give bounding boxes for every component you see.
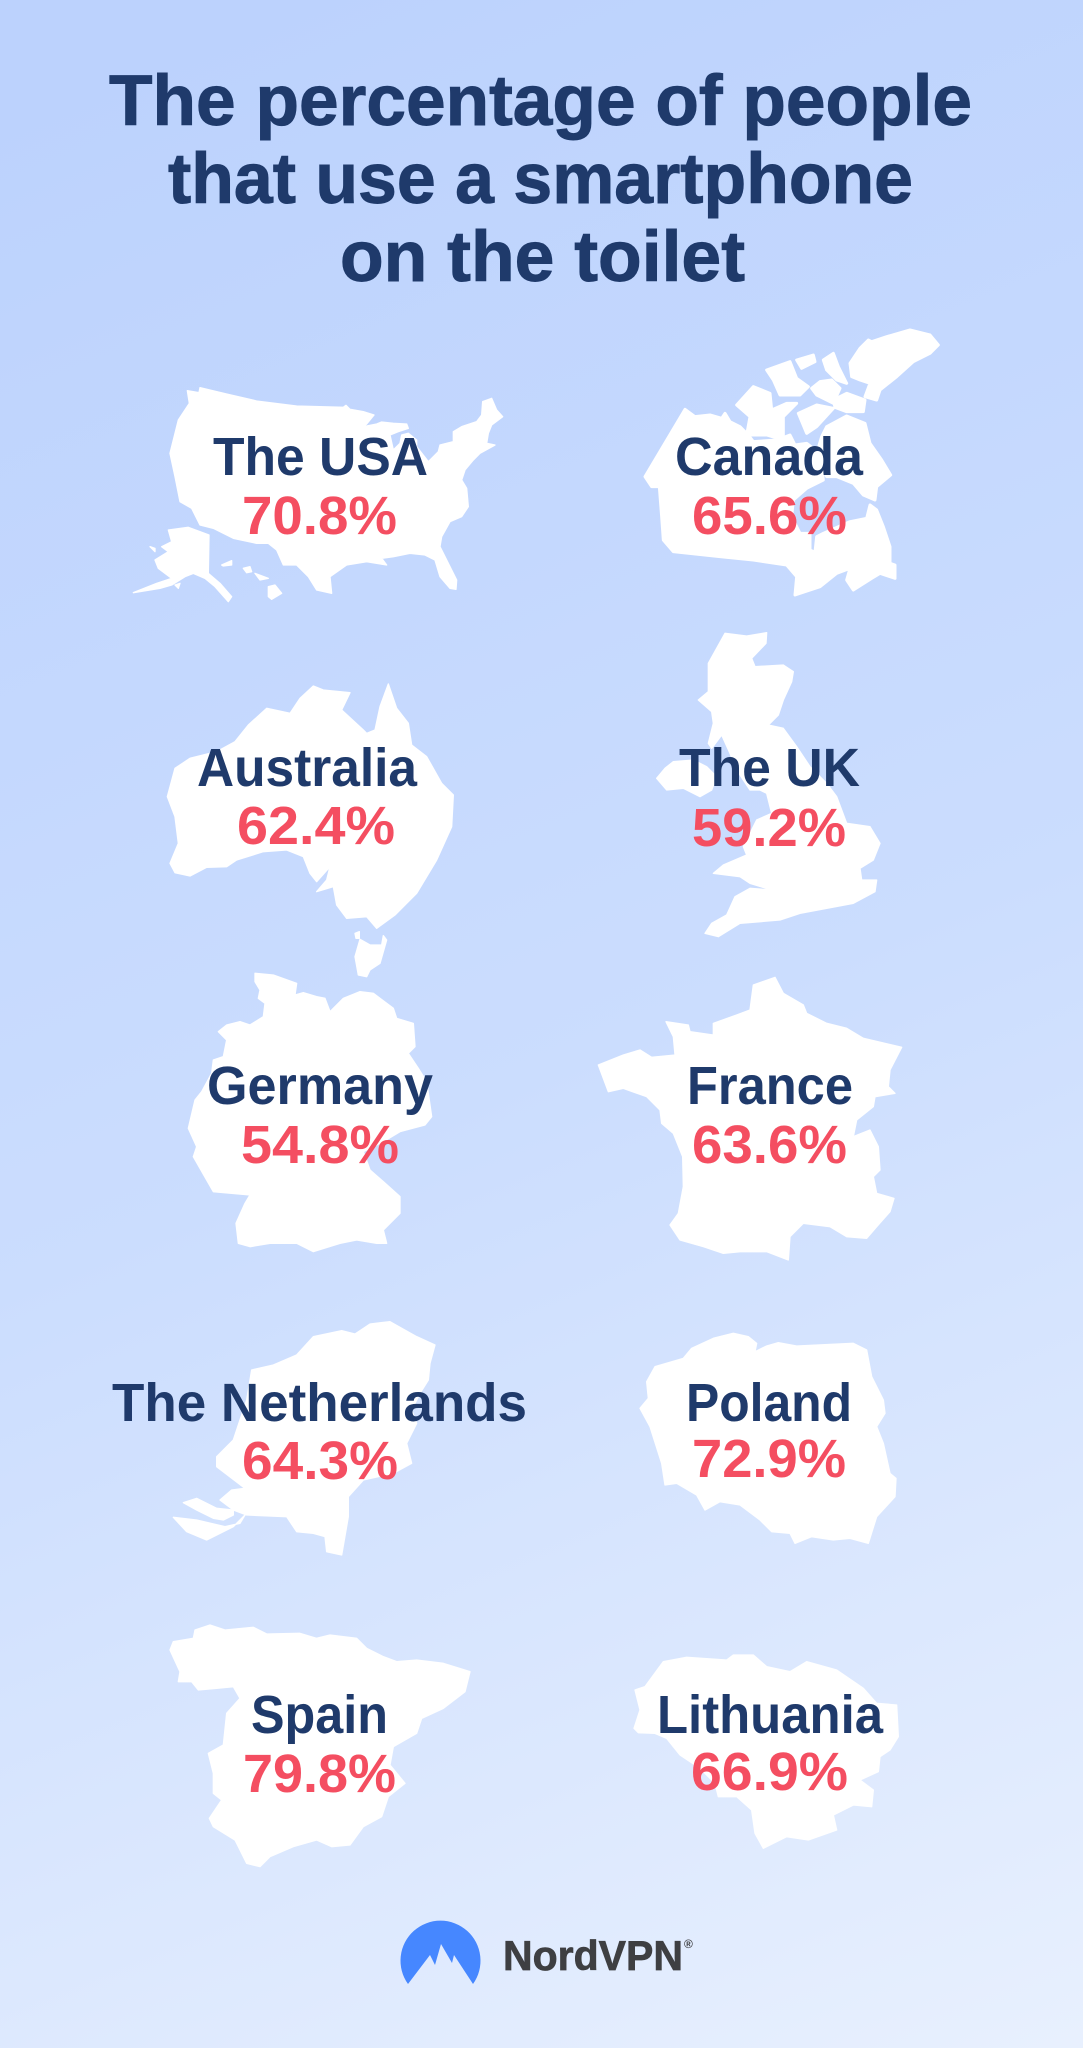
value: 62.4%: 62.4%	[237, 796, 395, 856]
label: Germany: Germany	[207, 1056, 433, 1116]
label: The UK: The UK	[679, 738, 860, 798]
map: Spain	[170, 1625, 470, 1867]
label: France: France	[687, 1056, 853, 1116]
value: 59.2%: 59.2%	[692, 798, 846, 858]
label: The Netherlands: The Netherlands	[112, 1373, 527, 1433]
panel: France	[598, 977, 902, 1260]
map: USA	[133, 388, 503, 602]
value: 66.9%: 66.9%	[691, 1742, 848, 1802]
title: that use a smartphone	[168, 140, 913, 219]
value: 64.3%: 64.3%	[242, 1431, 398, 1491]
panel: Canada	[645, 330, 938, 595]
label: The USA: The USA	[213, 427, 428, 487]
label: Australia: Australia	[197, 738, 418, 798]
panel: Australia	[167, 684, 453, 977]
map: Germany	[188, 973, 432, 1252]
title	[109, 62, 972, 297]
label: Spain: Spain	[251, 1685, 388, 1745]
logo: NordVPN	[400, 1921, 693, 1984]
value: 65.6%: 65.6%	[692, 486, 847, 546]
map: France	[598, 977, 902, 1260]
map: Poland	[640, 1333, 896, 1543]
panel: The UK	[657, 633, 880, 937]
registered mark: ®	[684, 1937, 693, 1951]
title: The percentage of people	[109, 62, 972, 141]
icon: NordVPN mountain dome	[400, 1921, 480, 1984]
label: Poland: Poland	[686, 1373, 852, 1433]
map: Netherlands	[173, 1322, 435, 1555]
panel: Lithuania	[634, 1655, 898, 1848]
panel: The USA	[133, 388, 503, 602]
map: Australia	[167, 684, 453, 977]
value: 70.8%: 70.8%	[242, 486, 397, 546]
map: UK	[657, 633, 880, 937]
value: 54.8%: 54.8%	[241, 1115, 399, 1175]
panel: Spain	[170, 1625, 470, 1867]
title: on the toilet	[340, 218, 745, 297]
value: 63.6%: 63.6%	[692, 1115, 847, 1175]
map: Lithuania	[634, 1655, 898, 1848]
wordmark: NordVPN	[503, 1932, 683, 1979]
panel: Germany	[188, 973, 433, 1252]
panel: Poland	[640, 1333, 896, 1543]
value: 72.9%: 72.9%	[692, 1429, 846, 1489]
label: Canada: Canada	[675, 427, 864, 487]
panel: The Netherlands	[112, 1322, 527, 1555]
map: Canada	[645, 330, 938, 595]
value: 79.8%: 79.8%	[243, 1744, 396, 1804]
label: Lithuania: Lithuania	[657, 1685, 884, 1745]
